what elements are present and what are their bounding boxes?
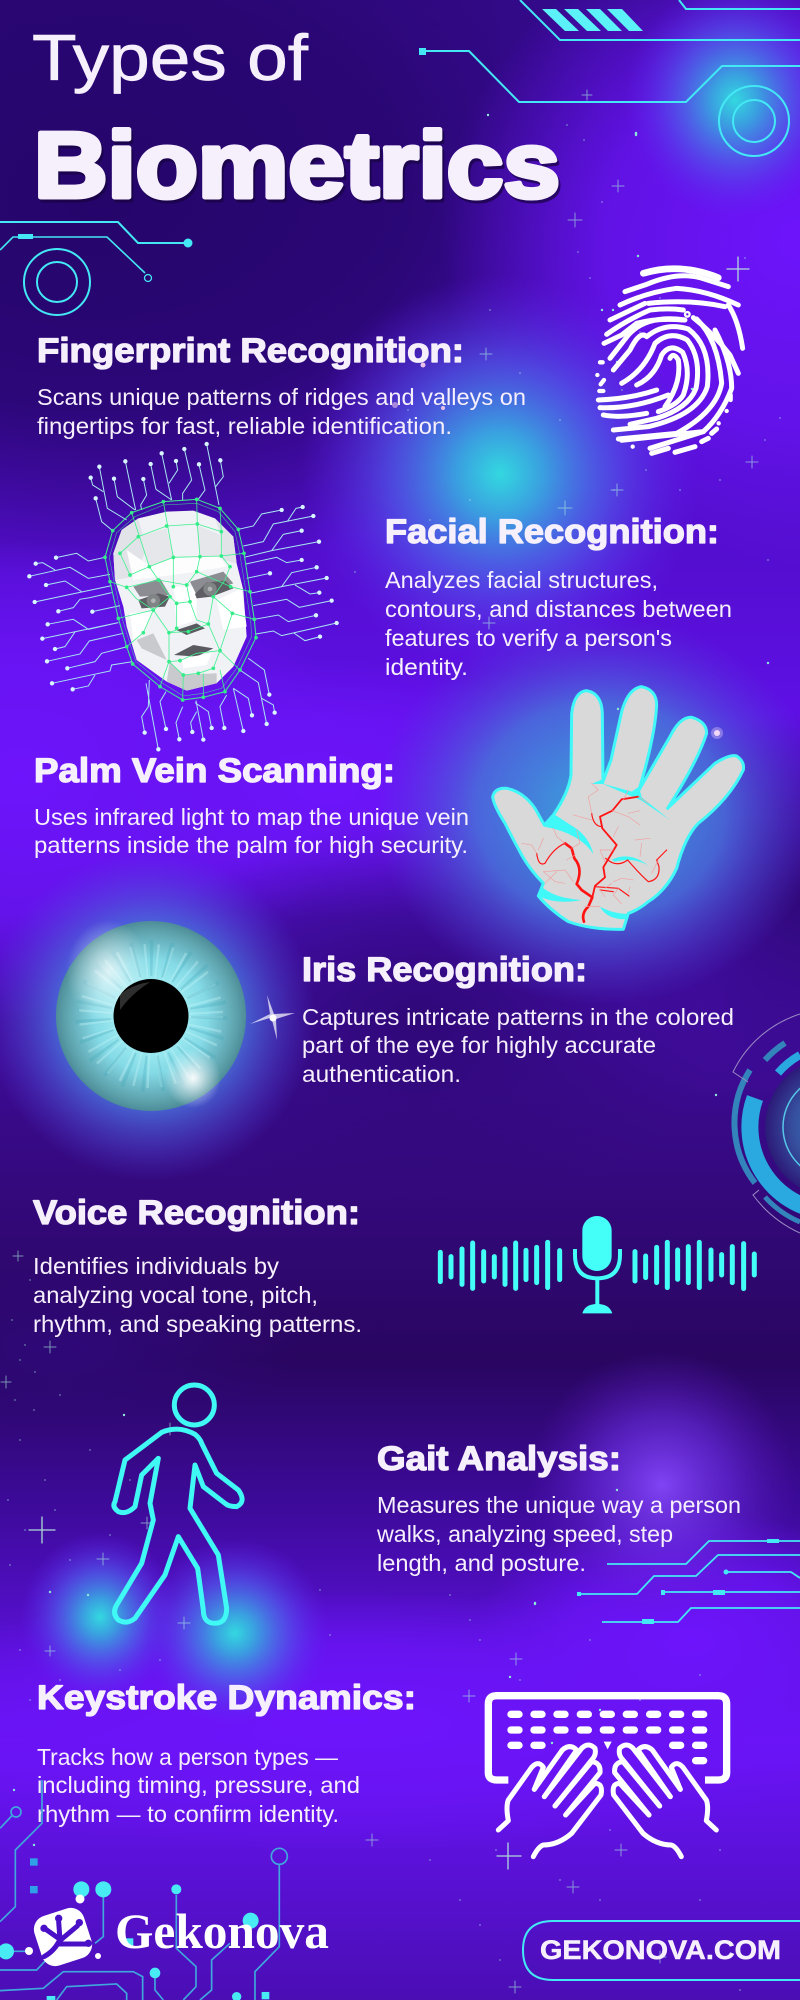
section: keystroke dynamics: Keystroke Dynamics: bbox=[37, 1679, 416, 1717]
circuit lines: right middle bbox=[577, 1539, 800, 1624]
section: facial recognition: identity. bbox=[385, 654, 468, 680]
section: gait analysis: Measures the unique way a person bbox=[377, 1492, 741, 1518]
title: Biometrics bbox=[34, 113, 560, 217]
section: keystroke dynamics: including timing, pressure, and bbox=[37, 1772, 360, 1798]
section: gait analysis: length, and posture. bbox=[377, 1550, 586, 1576]
section: iris recognition: part of the eye for highly accurate bbox=[302, 1032, 656, 1058]
icon: eye iris bbox=[56, 920, 246, 1111]
section: gait analysis bbox=[376, 1440, 741, 1576]
section: palm vein scanning: Uses infrared light to map the unique vein bbox=[34, 804, 469, 830]
section: voice recognition bbox=[33, 1194, 362, 1337]
section: iris recognition: authentication. bbox=[302, 1061, 461, 1087]
section: fingerprint recognition: fingertips for fast, reliable identification. bbox=[37, 413, 452, 439]
section: voice recognition: Identifies individuals by bbox=[33, 1253, 280, 1279]
circuit lines: top right bbox=[419, 0, 800, 156]
section: iris recognition: Captures intricate patterns in the colored bbox=[302, 1004, 734, 1030]
sparkles bbox=[250, 362, 723, 1040]
title: Types of bbox=[32, 21, 309, 94]
icon: fingerprint bbox=[597, 269, 743, 453]
icon: microphone with sound wave bbox=[440, 1216, 754, 1313]
face mask bbox=[113, 511, 247, 691]
section: gait analysis: walks, analyzing speed, step bbox=[376, 1521, 673, 1547]
section: keystroke dynamics bbox=[37, 1679, 416, 1827]
section: palm vein scanning bbox=[34, 752, 469, 858]
logo badge bbox=[25, 1894, 101, 1970]
section: facial recognition: features to verify a person's bbox=[385, 625, 672, 651]
icon: palm with veins bbox=[493, 687, 744, 929]
website pill: GEKONOVA.COM bbox=[540, 1935, 781, 1965]
section: fingerprint recognition bbox=[37, 332, 526, 439]
icon: face scan bbox=[29, 444, 337, 749]
section: facial recognition bbox=[385, 513, 732, 680]
section: keystroke dynamics: Tracks how a person types — bbox=[37, 1744, 338, 1770]
section: facial recognition: Analyzes facial structures, bbox=[385, 567, 658, 593]
section: palm vein scanning: patterns inside the palm for high security. bbox=[34, 832, 468, 858]
section: gait analysis: Gait Analysis: bbox=[377, 1440, 621, 1478]
title: Biometrics bbox=[36, 116, 562, 220]
section: facial recognition: Facial Recognition: bbox=[385, 513, 719, 551]
section: iris recognition bbox=[302, 951, 734, 1087]
circuit traces bbox=[29, 444, 337, 749]
logo: Gekonova bbox=[25, 1894, 329, 1970]
section: iris recognition: Iris Recognition: bbox=[302, 951, 587, 989]
section: keystroke dynamics: rhythm — to confirm identity. bbox=[37, 1801, 339, 1827]
circuit lines: top left bbox=[0, 222, 192, 315]
logo: Gekonova: Gekonova bbox=[115, 1903, 329, 1959]
section: palm vein scanning: Palm Vein Scanning: bbox=[34, 752, 395, 790]
decoration: tech ring bbox=[733, 1014, 800, 1233]
icon: hands on keyboard bbox=[488, 1696, 727, 1857]
section: fingerprint recognition: Fingerprint Recognition: bbox=[37, 332, 464, 370]
section: voice recognition: analyzing vocal tone, pitch, bbox=[33, 1282, 318, 1308]
circuit lines: bottom left bbox=[0, 1780, 287, 2000]
section: facial recognition: contours, and distances between bbox=[385, 596, 732, 622]
icon: walking figure bbox=[114, 1385, 242, 1623]
section: voice recognition: Voice Recognition: bbox=[33, 1194, 360, 1232]
section: voice recognition: rhythm, and speaking patterns. bbox=[33, 1311, 362, 1337]
website pill bbox=[523, 1921, 800, 1980]
landmark mesh bbox=[105, 499, 256, 700]
section: fingerprint recognition: Scans unique patterns of ridges and valleys on bbox=[37, 384, 526, 410]
title bbox=[32, 21, 562, 220]
